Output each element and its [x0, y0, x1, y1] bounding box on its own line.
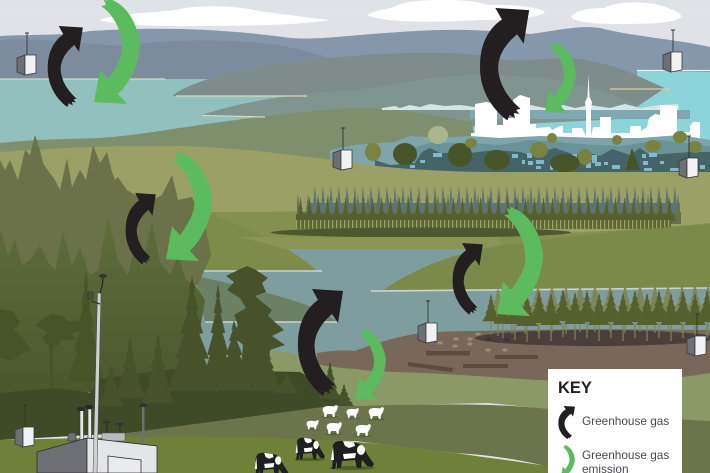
lake [190, 249, 710, 364]
cloud: centre [367, 0, 545, 22]
back row trees [487, 284, 710, 336]
lake highlights [200, 271, 710, 322]
foreground green paddock [0, 437, 590, 473]
key heading: KEY [558, 379, 592, 397]
hut left side [37, 438, 87, 473]
front houses [375, 148, 710, 176]
green arrow: city [545, 42, 576, 113]
black arrow: pasture [298, 289, 343, 396]
key panel [548, 369, 682, 473]
monitoring station [37, 274, 157, 473]
harbour band [470, 110, 690, 119]
mid mountains [0, 39, 340, 90]
scene: sky and clouds [0, 0, 710, 110]
left lake shore [190, 212, 317, 271]
black arrow: plantation [453, 243, 483, 315]
cleared brown land [317, 329, 710, 381]
green arrow: plantation [497, 207, 543, 316]
dark pasture strip [120, 403, 710, 473]
pine plantation [296, 186, 681, 229]
darkest tree line [0, 266, 354, 440]
cows [253, 438, 375, 473]
middle houses [398, 140, 710, 172]
pale tree [428, 126, 448, 144]
roof inlet pillars [77, 405, 123, 440]
sheep [305, 405, 385, 437]
front row trees [482, 289, 710, 342]
right harbour water [470, 71, 710, 145]
hut door [108, 456, 141, 473]
sensor: harbour right [663, 30, 682, 72]
distant suburbs [382, 104, 680, 114]
sensor: suburbs left [333, 128, 352, 170]
key icon: greenhouse gas [558, 406, 575, 439]
sensor: plantation [687, 314, 706, 356]
key icon: greenhouse gas emission [561, 445, 575, 473]
harvested plantation [475, 284, 710, 346]
rolling hill behind lake [205, 210, 710, 300]
headland hill [173, 53, 665, 118]
lake islet [195, 276, 338, 322]
cloud: right [571, 2, 681, 24]
sensor: lake edge [418, 301, 437, 343]
middle forest [0, 217, 205, 400]
green arrow: harbour emission [94, 0, 140, 104]
sensor: top left [17, 33, 36, 75]
left harbour water [0, 79, 640, 154]
black arrow: city [480, 8, 529, 120]
city trees [393, 143, 640, 172]
back forest [0, 135, 211, 300]
key label: greenhouse gas: Greenhouse gas [582, 414, 669, 428]
hut right side [87, 438, 157, 473]
key label: greenhouse gas emission: Greenhouse gas [582, 448, 669, 462]
far mountains [0, 27, 710, 90]
back houses [330, 135, 710, 175]
weather mast [88, 274, 107, 473]
roof boxes [102, 433, 125, 441]
near shore hill [0, 108, 478, 165]
sensor: station [15, 405, 34, 447]
mid-tone pines [0, 272, 104, 388]
sensor: suburbs right [679, 136, 698, 178]
shoreline highlights [0, 70, 710, 117]
plantation shadow [271, 228, 571, 238]
green arrow: forest [166, 152, 212, 261]
mushroom cap inlet [138, 403, 148, 445]
forest [0, 135, 354, 440]
windows [408, 153, 705, 171]
large pine [226, 266, 285, 385]
gray sampler on roof [68, 433, 76, 441]
green arrow: pasture [355, 329, 386, 400]
black arrow: harbour sink [48, 26, 83, 107]
white towers [471, 75, 700, 143]
pale pasture [200, 350, 710, 425]
right lake shore hill [382, 224, 710, 291]
logs and stumps [408, 332, 538, 372]
grass strip above lake [240, 237, 500, 249]
black arrow: forest [126, 193, 156, 265]
lower headland hill [202, 75, 640, 130]
foreground hill: olive pasture [0, 146, 710, 300]
city skyline [330, 75, 710, 176]
cloud: left [100, 6, 330, 26]
